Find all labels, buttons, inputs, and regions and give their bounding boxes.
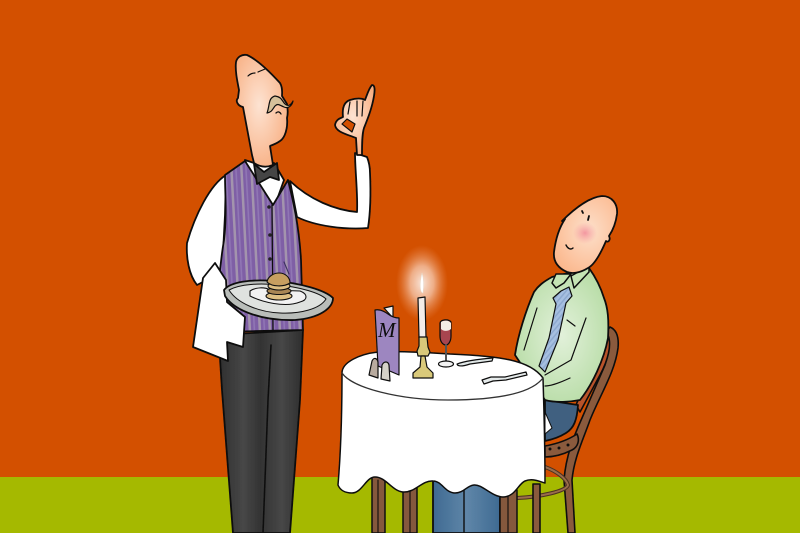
diner face bbox=[566, 211, 589, 249]
waiter vest bbox=[218, 161, 303, 332]
knife bbox=[457, 358, 493, 366]
diner tie bbox=[539, 287, 572, 372]
shirt creases bbox=[524, 308, 586, 386]
diner head bbox=[554, 196, 617, 273]
menu bbox=[375, 306, 399, 375]
plate bbox=[250, 288, 306, 304]
waiter trousers bbox=[218, 330, 303, 533]
salt and pepper shakers bbox=[369, 358, 390, 381]
fork bbox=[482, 372, 527, 384]
diner legs bbox=[433, 480, 500, 533]
diner trousers bbox=[545, 400, 578, 441]
menu: M bbox=[377, 318, 397, 342]
food stack bbox=[266, 262, 292, 300]
diner bbox=[433, 196, 617, 533]
bow tie bbox=[254, 163, 279, 184]
candle bbox=[418, 273, 426, 338]
diner napkin bbox=[545, 412, 552, 434]
waiter left arm bbox=[187, 175, 226, 285]
chair studs bbox=[548, 444, 570, 450]
diner collar bbox=[552, 266, 589, 288]
tablecloth bbox=[338, 352, 545, 497]
scene bbox=[187, 55, 618, 533]
towel bbox=[193, 263, 245, 361]
candlestick bbox=[413, 337, 433, 378]
table bbox=[338, 352, 545, 533]
candle glow bbox=[396, 245, 448, 321]
waiter mouth bbox=[276, 112, 281, 114]
diner shirt bbox=[515, 268, 608, 402]
table legs bbox=[372, 470, 517, 533]
wine glass bbox=[438, 320, 454, 367]
waiter eye bbox=[248, 69, 265, 76]
waiter hand bbox=[335, 85, 375, 155]
waiter shirt front bbox=[245, 160, 284, 208]
table setting bbox=[369, 273, 527, 384]
waiter right arm bbox=[290, 153, 370, 229]
waiter head bbox=[236, 55, 288, 167]
finger ring gap bbox=[342, 119, 355, 132]
waiter bbox=[187, 55, 375, 533]
chair bbox=[517, 327, 618, 533]
vest buttons bbox=[267, 205, 274, 287]
tray bbox=[224, 280, 333, 320]
diner blush bbox=[573, 222, 597, 244]
waiter moustache bbox=[267, 96, 293, 113]
background: green floor bbox=[0, 477, 800, 533]
table edge bbox=[342, 373, 543, 400]
